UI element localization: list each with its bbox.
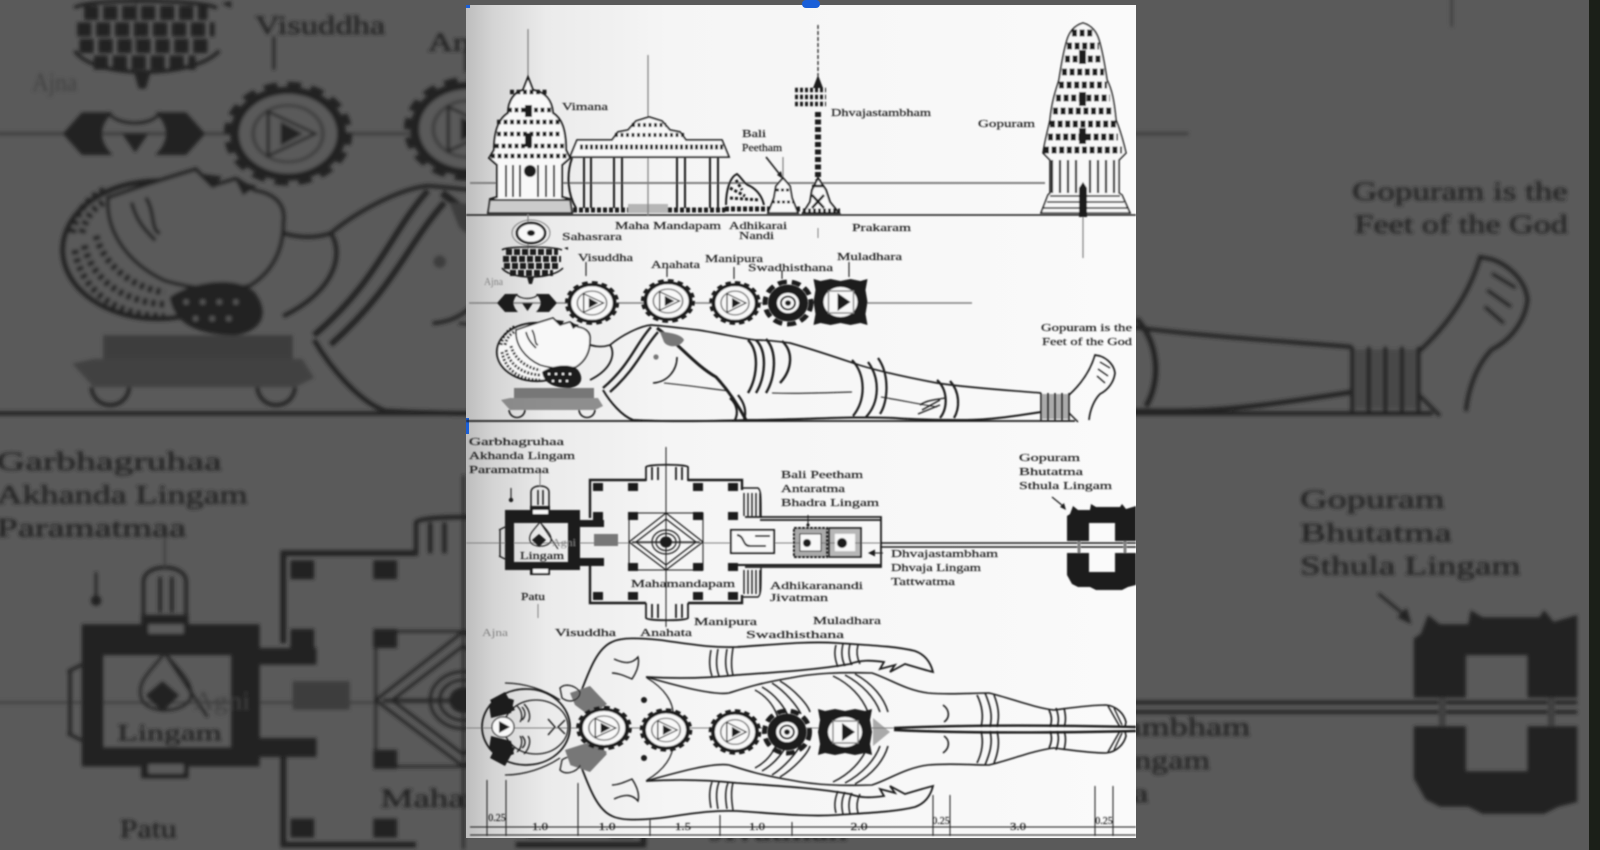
head from above <box>482 689 607 766</box>
stairs <box>741 488 761 518</box>
gopuram plan <box>1052 497 1136 590</box>
plan labels: Bali Peetham <box>781 469 864 481</box>
prakaram enclosure <box>735 517 881 567</box>
maha mandapam hall <box>590 465 761 603</box>
feet label: Feet of the God <box>1042 336 1133 348</box>
waist band <box>748 339 790 393</box>
supine labels: Ajna <box>482 627 508 639</box>
elevation labels: Maha Mandapam <box>615 220 722 232</box>
plan labels: Adhikaranandi <box>770 580 863 592</box>
supine anahata <box>642 710 690 750</box>
maha mandapam <box>569 55 729 215</box>
elevation labels: Adhikarai <box>729 220 787 232</box>
thigh band <box>852 358 886 417</box>
knee band <box>937 380 958 418</box>
muladhara chakra <box>814 279 868 325</box>
chakra labels: Ajna <box>484 276 503 288</box>
supine chakras <box>578 707 630 749</box>
plan lower portal and axis extensions <box>538 603 688 627</box>
measurement scale <box>470 780 1136 836</box>
measurement scale: 0.25 <box>488 813 506 824</box>
dhvaja stambham <box>795 25 840 238</box>
plan labels: Antaratma <box>781 483 845 495</box>
plan labels: Garbhagruhaa <box>469 436 564 448</box>
chakra labels: Swadhisthana <box>748 262 833 274</box>
plan labels: Paramatmaa <box>469 464 549 476</box>
hip sash <box>730 395 745 420</box>
plan labels: Sthula Lingam <box>1019 480 1113 492</box>
plan labels: Jivatman <box>770 592 829 604</box>
elevation labels: Gopuram <box>978 118 1036 130</box>
plan labels: Akhanda Lingam <box>469 450 576 462</box>
garbhagriha sanctum <box>499 470 604 575</box>
temple floor plan <box>466 436 1136 605</box>
chakra labels: Manipura <box>705 253 763 265</box>
plan labels: Bhutatma <box>1019 466 1083 478</box>
groin ornament <box>873 718 890 746</box>
central paper panel <box>466 5 1136 838</box>
supine labels <box>482 615 881 641</box>
vimana tower <box>488 29 572 268</box>
right edge dark strip <box>1589 0 1600 850</box>
sahasrara lotus <box>502 220 568 284</box>
supine labels: Anahata <box>640 627 692 639</box>
plan labels: Gopuram <box>1019 452 1081 464</box>
plan labels: Bhadra Lingam <box>781 497 880 509</box>
small nandi block <box>594 534 618 546</box>
elevation labels: Prakaram <box>852 222 912 234</box>
ankle band <box>1042 394 1069 419</box>
supine labels: Visuddha <box>555 627 616 639</box>
reclining body figure <box>466 318 1133 422</box>
measurement scale: 1.0 <box>598 821 616 833</box>
nandi box <box>731 530 774 553</box>
chakra labels: Sahasrara <box>562 231 622 243</box>
plan labels: Tattwatma <box>891 576 955 588</box>
pillars <box>593 483 738 600</box>
plan labels: Dhvaja Lingam <box>891 562 982 574</box>
feet label <box>1041 322 1133 348</box>
head <box>497 318 590 388</box>
chakra labels: Muladhara <box>837 251 902 263</box>
measurement scale: 0.25 <box>1095 816 1113 827</box>
elevation labels: Nandi <box>739 230 774 242</box>
anahata chakra <box>643 281 693 321</box>
chakra row <box>469 220 972 325</box>
measurement scale: 1.5 <box>675 821 692 833</box>
swadhisthana chakra <box>765 282 811 324</box>
elevation labels: Vimana <box>562 101 608 113</box>
bali peetham plan <box>794 515 883 557</box>
supine muladhara <box>818 709 872 755</box>
pedestal <box>501 388 603 418</box>
blue corner marks <box>466 0 820 434</box>
chakra labels: Visuddha <box>578 252 633 264</box>
nandi and bali peetham <box>725 157 800 213</box>
feet label: Gopuram is the <box>1041 322 1132 334</box>
main drawing <box>466 23 1136 836</box>
gopuram tower <box>1041 23 1130 258</box>
measurement scale: 1.0 <box>532 821 549 833</box>
supine labels: Manipura <box>694 616 757 628</box>
garbhagriha sanctum: Agni <box>552 537 576 549</box>
plan labels <box>469 436 1113 604</box>
ground lines <box>466 183 1136 215</box>
chakra labels: Anahata <box>651 259 700 271</box>
elevation labels: Peetham <box>742 142 782 154</box>
elevation labels <box>562 101 1036 242</box>
measurement scale: 2.0 <box>850 821 868 833</box>
measurement scale: 0.25 <box>932 816 950 827</box>
supine body figure <box>466 615 1136 836</box>
chakra pointers <box>586 262 849 279</box>
manipura chakra <box>711 283 759 323</box>
plan labels: Mahamandapam <box>631 578 736 590</box>
measurement scale: 1.0 <box>749 821 766 833</box>
plan labels: Dhvajastambham <box>891 548 999 560</box>
supine manipura <box>711 711 759 753</box>
vishuddha chakra <box>567 283 617 323</box>
measurement scale: 3.0 <box>1010 821 1027 833</box>
garbhagriha sanctum: Lingam <box>520 551 564 562</box>
torso and legs outline <box>590 325 1115 422</box>
plan labels: Patu <box>521 591 546 603</box>
elevation labels: Dhvajastambham <box>831 107 932 119</box>
supine labels: Swadhisthana <box>746 629 844 641</box>
temple elevation <box>466 23 1136 268</box>
supine swadhisthana <box>764 711 810 753</box>
elevation labels: Bali <box>742 128 766 140</box>
supine labels: Muladhara <box>813 615 881 627</box>
upper and lower body halves <box>490 638 1136 820</box>
ajna chakra <box>497 294 557 312</box>
chakra labels <box>484 231 902 288</box>
